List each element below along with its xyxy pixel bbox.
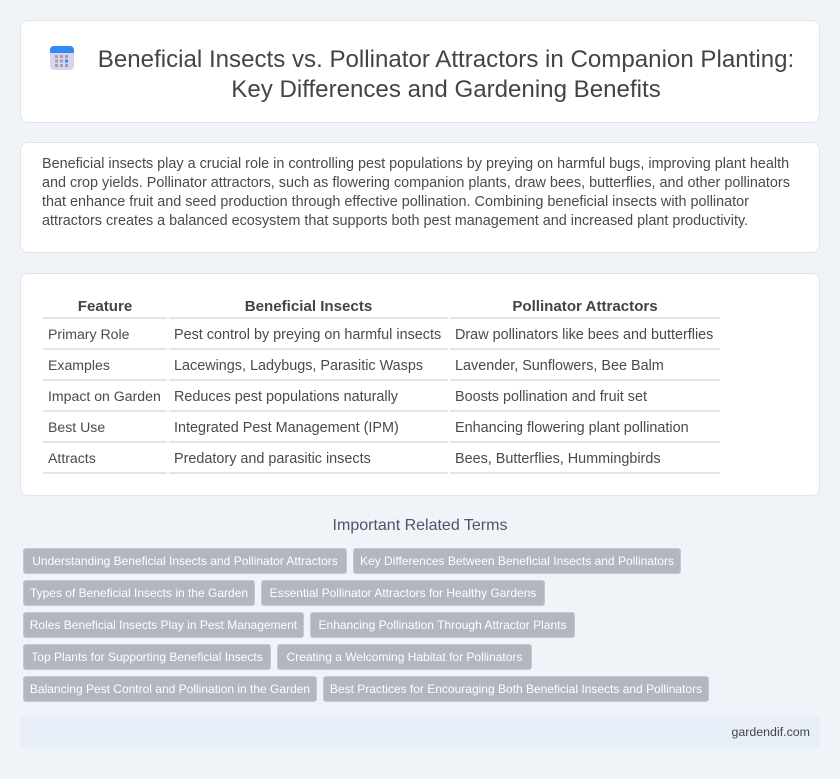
table: comparison: Reduces pest populations naturally [174,389,398,405]
tag: Types of Beneficial Insects in the Garden [30,586,248,600]
table: comparison: Lavender, Sunflowers, Bee Balm [455,358,664,374]
text block: summary [42,156,790,229]
text block: summary: that enhance fruit and seed production through effective pollination. Combining beneficial insects with pollinator [42,194,749,210]
tag: Essential Pollinator Attractors for Healthy Gardens [270,586,536,600]
table: comparison: Pest control by preying on harmful insects [174,327,441,343]
table: comparison: Integrated Pest Management (IPM) [174,420,399,436]
panel: title [20,20,820,123]
table: comparison: Boosts pollination and fruit set [455,389,647,405]
tag: Top Plants for Supporting Beneficial Insects [31,650,263,664]
tag: Roles Beneficial Insects Play in Pest Management [30,618,297,632]
table: comparison: Bees, Butterflies, Hummingbirds [455,451,661,467]
tag [353,548,681,574]
tag: Enhancing Pollination Through Attractor Plants [319,618,566,632]
text block: summary: Beneficial insects play a crucial role in controlling pest populations by preying on harmful bugs, improving plant health [42,156,789,172]
icon: calendar [50,46,74,70]
tag [310,612,575,638]
table: comparison [43,298,720,474]
table: comparison: Lacewings, Ladybugs, Parasitic Wasps [174,358,423,374]
tag [277,644,532,670]
heading: Key Differences and Gardening Benefits [231,76,661,103]
table: comparison: Beneficial Insects [245,298,372,315]
text block: summary: attractors creates a balanced ecosystem that supports both pest management and increased plant productivity. [42,213,748,229]
heading: Beneficial Insects vs. Pollinator Attractors in Companion Planting: [98,46,794,73]
tag: Creating a Welcoming Habitat for Pollinators [287,650,522,664]
row: primary role: Primary Role [48,326,129,342]
tag: Understanding Beneficial Insects and Pollinator Attractors [32,554,338,568]
heading [98,46,794,103]
tag: Key Differences Between Beneficial Insects and Pollinators [360,554,674,568]
related term tags [23,548,709,702]
footer credit: gardendif.com [731,725,810,739]
tag [323,676,709,702]
tag [23,644,271,670]
text block: summary: and crop yields. Pollinator attractors, such as flowering companion plants, draw bees, butterflies, and other pollinators [42,175,790,191]
tag [23,580,255,606]
row: examples: Examples [48,357,110,373]
tag [261,580,545,606]
tag: Best Practices for Encouraging Both Beneficial Insects and Pollinators [330,682,702,696]
tag [23,548,347,574]
tag [23,612,304,638]
table: comparison: Draw pollinators like bees and butterflies [455,327,713,343]
table: comparison: Enhancing flowering plant pollination [455,420,689,436]
table: comparison: Predatory and parasitic insects [174,451,371,467]
row: impact on garden: Impact on Garden [48,388,161,404]
row: attracts: Attracts [48,450,96,466]
panel: comparison table [20,273,820,496]
heading: related terms: Important Related Terms [333,517,507,534]
footer [20,715,820,749]
table: comparison: Pollinator Attractors [512,298,658,315]
tag: Balancing Pest Control and Pollination in the Garden [30,682,310,696]
row: best use: Best Use [48,419,105,435]
table header: Feature [78,298,132,315]
tag [23,676,317,702]
panel: summary [20,142,820,253]
